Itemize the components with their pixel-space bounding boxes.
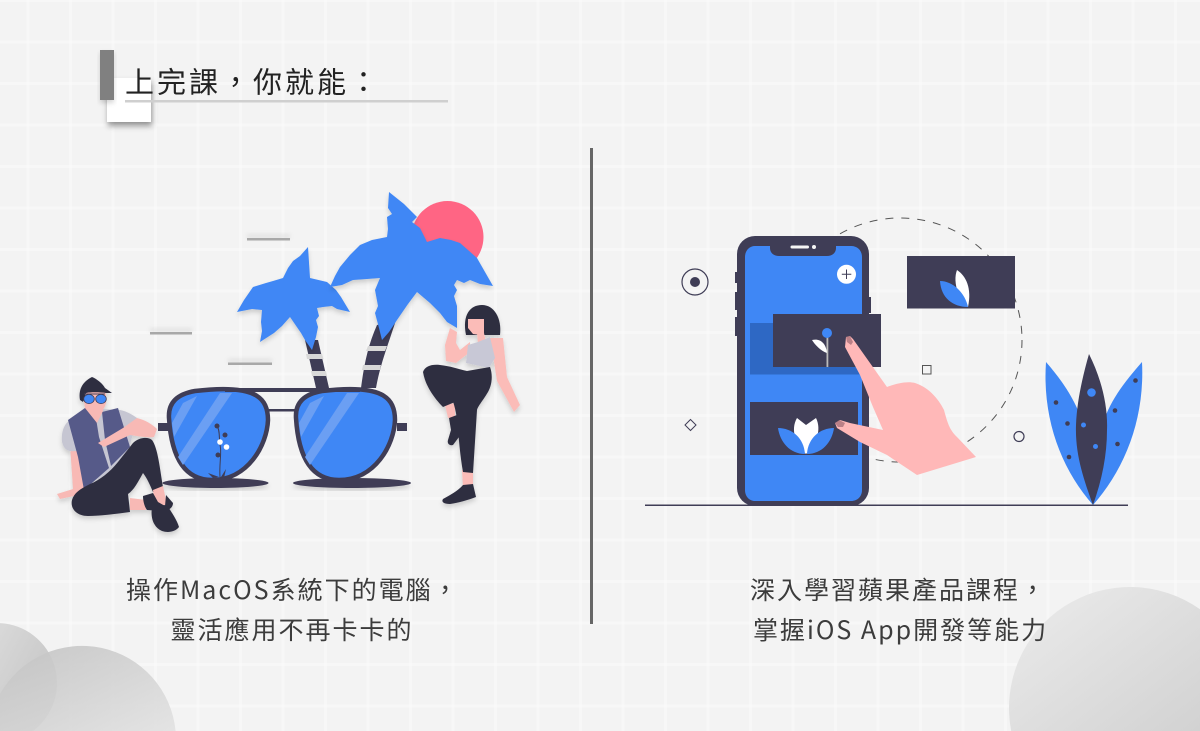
- divider: [590, 148, 593, 624]
- small shapes: [682, 269, 1024, 442]
- caption left: 靈活應用不再卡卡的: [170, 611, 414, 647]
- lens plant: [208, 424, 229, 478]
- caption left: [126, 571, 460, 647]
- man arm left: [57, 445, 85, 499]
- glasses frame: [158, 388, 407, 431]
- phone screen: [745, 246, 862, 501]
- heading white square: [107, 78, 151, 122]
- decorative circle: bottom right: [1009, 587, 1200, 731]
- illustration: sunglasses and palm trees: [150, 192, 493, 488]
- caption right: [750, 571, 1048, 647]
- man ankles: [130, 486, 167, 510]
- left leaf: [1045, 362, 1093, 505]
- hand: [835, 336, 976, 475]
- card: flower: [773, 314, 881, 367]
- icon: diamond: [685, 420, 696, 430]
- caption right: 深入學習蘋果產品課程，: [750, 571, 1047, 607]
- phone: [735, 236, 871, 506]
- man head: [80, 377, 112, 423]
- center leaf: [1076, 354, 1107, 505]
- palm trunks: [305, 320, 396, 388]
- ground ellipses: [162, 478, 411, 488]
- dark blue panel: [750, 323, 860, 374]
- leaf dots: [1054, 378, 1138, 459]
- cloud lines: [150, 238, 290, 365]
- phone buttons: [735, 272, 871, 336]
- small palm crown: [237, 247, 350, 350]
- man arm right: [98, 418, 157, 447]
- woman shoes: [442, 415, 476, 504]
- man shirt: [62, 408, 137, 490]
- heading grey bar: [100, 50, 114, 100]
- dashed circle: [778, 218, 1022, 462]
- woman neck and arms: [445, 328, 520, 412]
- right lens: [296, 389, 395, 480]
- man shoes: [143, 493, 179, 532]
- heading underline: [125, 100, 448, 102]
- ground line: [645, 504, 1128, 506]
- phone speaker: [790, 245, 816, 249]
- decorative circles: bottom left: [0, 623, 176, 731]
- illustration: sitting man: [57, 377, 179, 532]
- woman trousers: [423, 365, 492, 473]
- caption right: 掌握iOS App開發等能力: [753, 611, 1048, 647]
- caption left: 操作MacOS系統下的電腦，: [126, 571, 460, 607]
- heading text: 上完課，你就能：: [125, 60, 381, 102]
- woman hair: [465, 305, 500, 335]
- man vest: [68, 408, 130, 490]
- sun: [412, 201, 484, 273]
- plant: [1045, 354, 1142, 505]
- heading block: [100, 50, 448, 122]
- lotus card: [750, 402, 858, 455]
- woman top: [466, 337, 495, 368]
- plus button: [837, 265, 856, 284]
- man legs: [72, 438, 163, 516]
- card: top right leaf: [907, 256, 1015, 308]
- phone body: [737, 236, 869, 506]
- icon: square: [922, 366, 931, 374]
- right leaf: [1093, 362, 1142, 505]
- illustration: standing woman: [423, 305, 520, 504]
- left lens: [169, 389, 268, 480]
- icon: ring: [1014, 432, 1024, 442]
- woman face: [468, 319, 484, 335]
- big palm crown: [330, 192, 493, 340]
- icon: target: [682, 269, 708, 295]
- woman lower skin: [445, 403, 473, 488]
